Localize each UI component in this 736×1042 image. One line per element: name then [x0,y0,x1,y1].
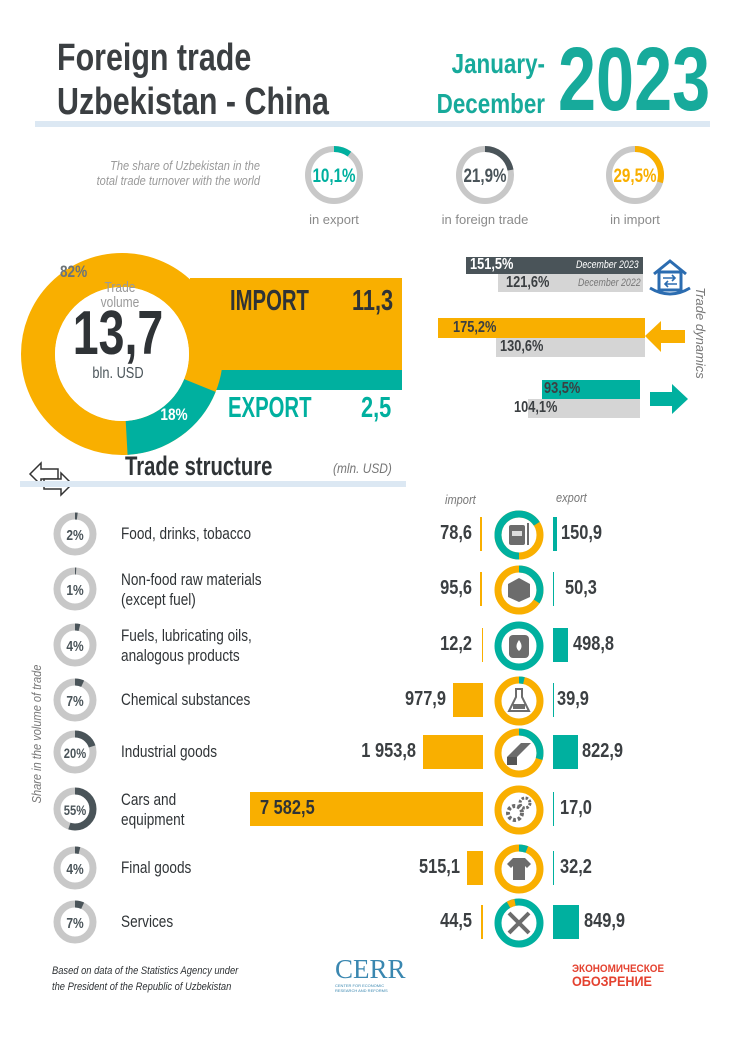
row: cars and equipment: 17,0 [560,797,592,819]
row: cars and equipment: Cars and [121,790,176,809]
trade dynamics: total: December 2023 [576,259,639,271]
row: fuels [54,622,614,670]
row: cars and equipment: 7 582,5 [260,797,315,819]
arrow: import [645,321,685,352]
trade dynamics: export: 93,5% [544,380,580,397]
arrow: export [650,384,688,414]
row: final goods: Final goods [121,858,191,877]
text: (mln. USD) [333,460,392,476]
row: services [54,898,625,948]
footer: source [52,965,238,993]
period: January- [452,48,545,79]
period: December [437,88,545,119]
row: industrial goods: 1 953,8 [361,740,416,762]
row: cars and equipment: 55% [64,803,86,818]
import/export bars [190,278,402,390]
donut: in export: 10,1% [312,164,356,186]
subtitle: share text [97,158,260,188]
row: industrial goods: Industrial goods [121,742,217,761]
text: export [556,490,587,505]
row: non-food raw materials: 50,3 [565,577,597,599]
row: food: 2% [66,527,84,543]
export label: EXPORT [228,392,311,424]
row: non-food raw materials: 1% [66,582,84,598]
footer: source: the President of the Republic of Uzbekistan [52,981,231,993]
row: final goods: 4% [66,861,84,877]
donut: in export [305,146,363,227]
donut: in foreign trade: in foreign trade [442,212,528,227]
period [437,48,545,119]
row: final goods: 32,2 [560,856,592,878]
donut: in import [606,146,664,227]
row: chemical: 39,9 [557,688,589,710]
row: industrial goods [54,728,623,778]
big donut: trade volume: Trade [105,279,135,295]
title [57,37,330,123]
row: food [54,510,602,560]
trade dynamics: total [466,256,643,292]
export label [228,392,391,424]
row: non-food raw materials: Non-food raw materials [121,570,262,589]
row: industrial goods: 20% [64,746,86,761]
row: services: 44,5 [440,910,472,932]
icon: trade house [649,259,691,296]
footer: source: Based on data of the Statistics Agency under [52,965,238,977]
icon: exchange arrows [29,461,70,497]
big donut: trade volume: bln. USD [92,365,144,382]
donut: in import: in import [610,212,660,227]
import label: IMPORT [230,285,309,317]
trade dynamics label: Trade dynamics [693,287,708,379]
row: final goods: 515,1 [419,856,460,878]
donut: in foreign trade [442,146,528,227]
row: fuels: 12,2 [440,633,472,655]
title: Foreign trade [57,37,251,79]
big donut: trade volume: 18% [160,406,188,424]
logo: CERR: RESEARCH AND REFORMS [335,988,388,993]
title: Uzbekistan - China [57,81,329,123]
logo: economic review [572,963,664,989]
row: fuels: Fuels, lubricating oils, [121,626,252,645]
row: food: Food, drinks, tobacco [121,524,251,543]
row: cars and equipment [54,786,592,834]
row: non-food raw materials [54,566,597,614]
trade dynamics: total: 151,5% [470,256,513,273]
trade dynamics: import [438,318,685,357]
row: services: 7% [66,915,84,931]
trade dynamics: total: 121,6% [506,274,549,291]
row: non-food raw materials: (except fuel) [121,590,196,609]
row: chemical: Chemical substances [121,690,250,709]
row: fuels: 498,8 [573,633,614,655]
row: food: 150,9 [561,522,602,544]
trade dynamics: import: 130,6% [500,338,543,355]
row: services: Services [121,912,173,931]
export label: 2,5 [361,392,391,424]
logo: economic review: ОБОЗРЕНИЕ [572,973,652,989]
donut: in foreign trade: 21,9% [463,164,507,186]
trade dynamics: export [514,380,688,418]
big donut: trade volume: 82% [60,263,87,281]
row: fuels: 4% [66,638,84,654]
subtitle: share text: The share of Uzbekistan in the [110,158,260,173]
row: industrial goods: 822,9 [582,740,623,762]
heading: trade structure: Trade structure [125,451,272,481]
row: services: 849,9 [584,910,625,932]
row: non-food raw materials: 95,6 [440,577,472,599]
trade dynamics: total: December 2022 [578,277,641,289]
trade dynamics: export: 104,1% [514,399,557,416]
subtitle: share text: total trade turnover with the world [97,173,260,188]
row: final goods [54,844,592,894]
row: chemical [54,676,589,726]
logo: CERR: CENTER FOR ECONOMIC [335,983,384,988]
row: cars and equipment: equipment [121,810,185,829]
row: chemical: 7% [66,693,84,709]
donut: in import: 29,5% [613,164,657,186]
column headers: import [445,492,476,507]
import/export bars: 11,3 [352,285,393,317]
big donut: trade volume: volume [101,294,139,310]
logo: economic review: ЭКОНОМИЧЕСКОЕ [572,963,664,975]
row: food: 78,6 [440,522,472,544]
row: fuels: analogous products [121,646,240,665]
year: 2023 [558,30,710,130]
logo: CERR: CERR [335,954,406,984]
big donut: trade volume [21,253,222,455]
trade dynamics: import: 175,2% [453,319,496,336]
big donut: trade volume: 13,7 [73,297,163,368]
row: chemical: 977,9 [405,688,446,710]
donut: in export: in export [309,212,359,227]
side label: Share in the volume of trade [29,665,44,803]
